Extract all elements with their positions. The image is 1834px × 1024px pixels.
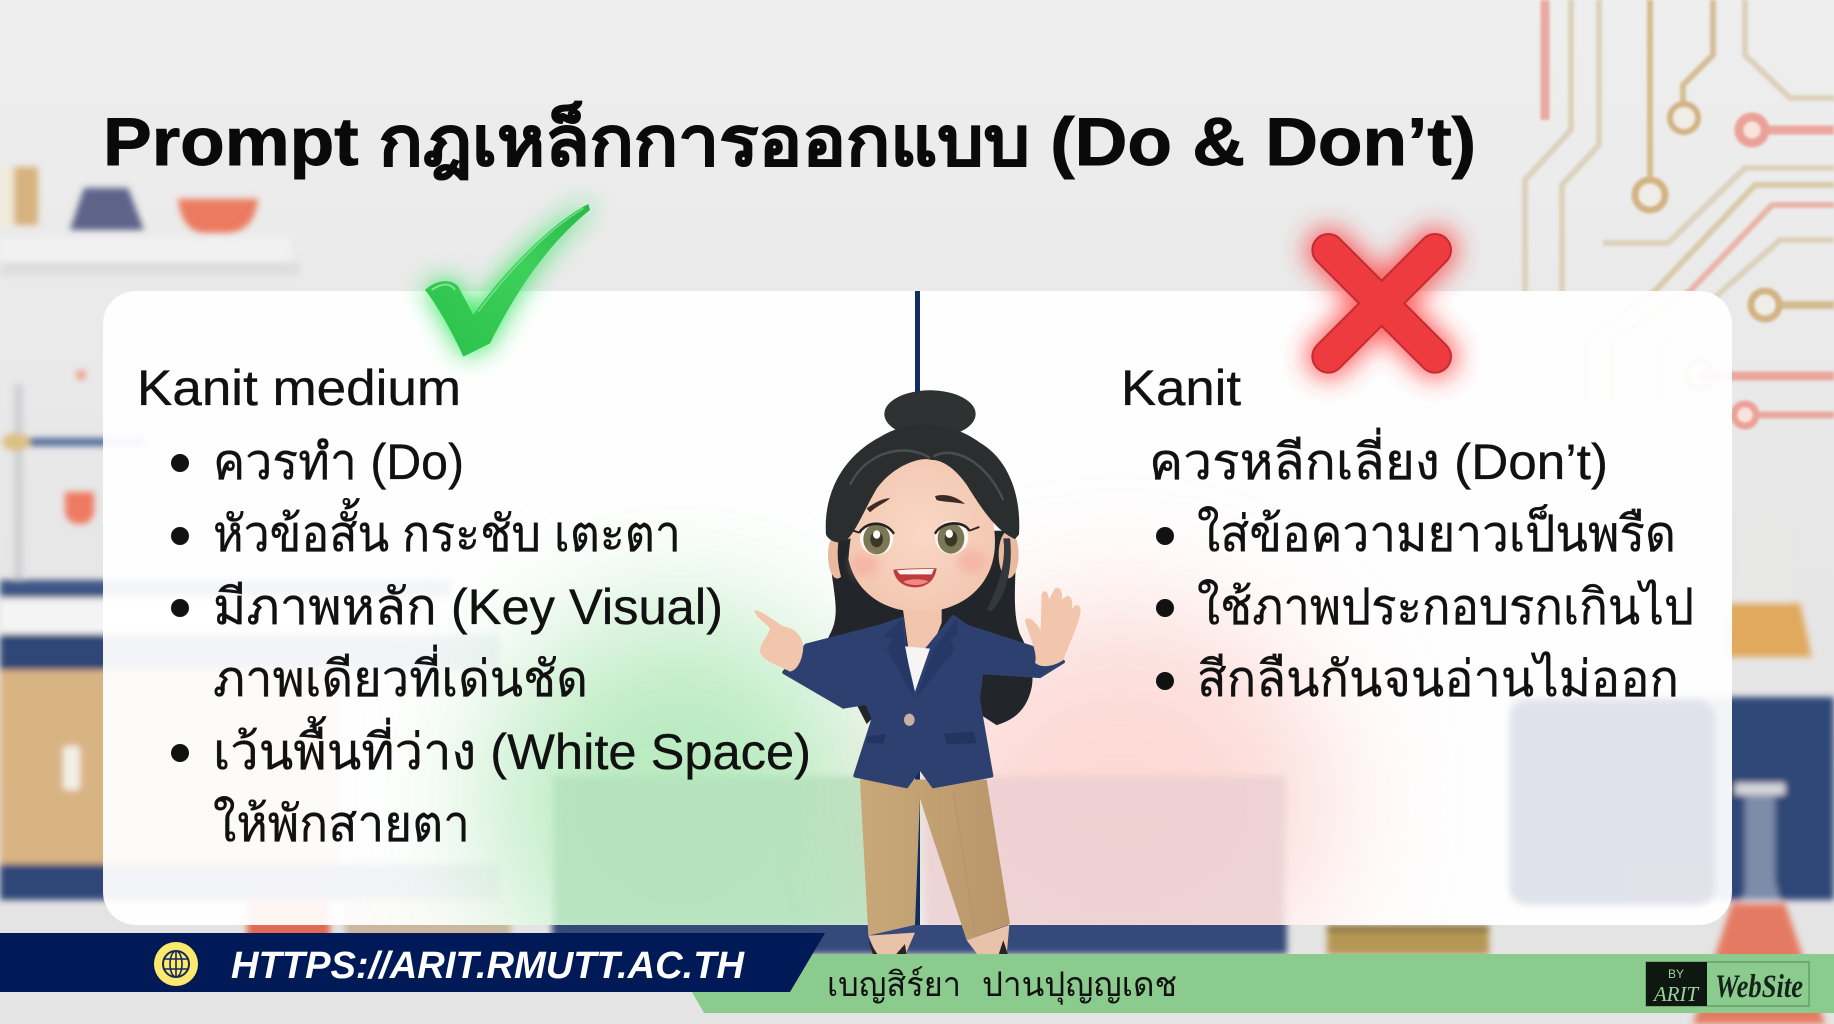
do bullet markers <box>171 454 189 762</box>
do items: ควรทำ (Do) <box>213 434 464 490</box>
do items: เว้นพื้นที่ว่าง (White Space) <box>213 716 811 780</box>
circuit traces decoration <box>1525 0 1834 426</box>
icon: globe <box>154 942 198 986</box>
do items: มีภาพหลัก (Key Visual) <box>213 579 723 635</box>
left heading: Kanit medium <box>137 360 461 416</box>
don't subheading: ควรหลีกเลี่ยง (Don’t) <box>1149 428 1608 490</box>
logo: by ARIT website <box>1646 962 1809 1006</box>
panel: do and don't content card <box>103 291 1732 990</box>
author name <box>827 966 1177 1005</box>
do items <box>213 434 811 852</box>
mouth <box>893 568 937 587</box>
navy url ribbon <box>0 933 825 992</box>
hair and bun <box>826 390 1019 611</box>
don't items <box>1197 504 1694 707</box>
ears <box>828 531 1019 579</box>
face <box>847 452 995 612</box>
blazer and sleeves <box>784 617 1063 786</box>
centre divider line <box>915 291 920 925</box>
logo: by ARIT website: ARIT <box>1652 982 1699 1006</box>
title: Prompt กฎเหล็กการออกแบบ (Do & Don’t) <box>103 101 1476 180</box>
eyes and brows <box>853 495 979 555</box>
left column: do list <box>137 360 811 852</box>
do items: ภาพเดียวที่เด่นชัด <box>213 645 588 707</box>
don't items: ใช้ภาพประกอบรกเกินไป <box>1197 579 1694 635</box>
logo: by ARIT website: WebSite <box>1715 969 1803 1005</box>
footer: website address bar <box>0 933 1834 1013</box>
don't bullet markers <box>1156 527 1174 690</box>
green name ribbon <box>692 954 1834 1013</box>
character: woman in navy blazer <box>754 390 1081 956</box>
url text: HTTPS://ARIT.RMUTT.AC.TH <box>231 945 746 987</box>
author name: ปานปุญญเดช <box>982 966 1177 1005</box>
don't items: สีกลืนกันจนอ่านไม่ออก <box>1197 651 1679 707</box>
back hair <box>826 531 1033 725</box>
right heading: Kanit <box>1121 360 1241 416</box>
hands <box>754 588 1081 672</box>
do items: หัวข้อสั้น กระชับ เตะตา <box>213 498 681 562</box>
cheeks <box>851 550 986 576</box>
icon: green check mark <box>425 204 590 357</box>
do items: ให้พักสายตา <box>213 796 470 852</box>
trousers <box>860 779 1010 956</box>
logo: by ARIT website: BY <box>1668 967 1684 981</box>
author name: เบญสิร์ยา <box>827 966 961 1004</box>
neck <box>902 600 942 661</box>
right column: don't list <box>1121 360 1694 707</box>
don't items: ใส่ข้อความยาวเป็นพรืด <box>1197 504 1676 562</box>
icon: red cross <box>1328 250 1435 357</box>
